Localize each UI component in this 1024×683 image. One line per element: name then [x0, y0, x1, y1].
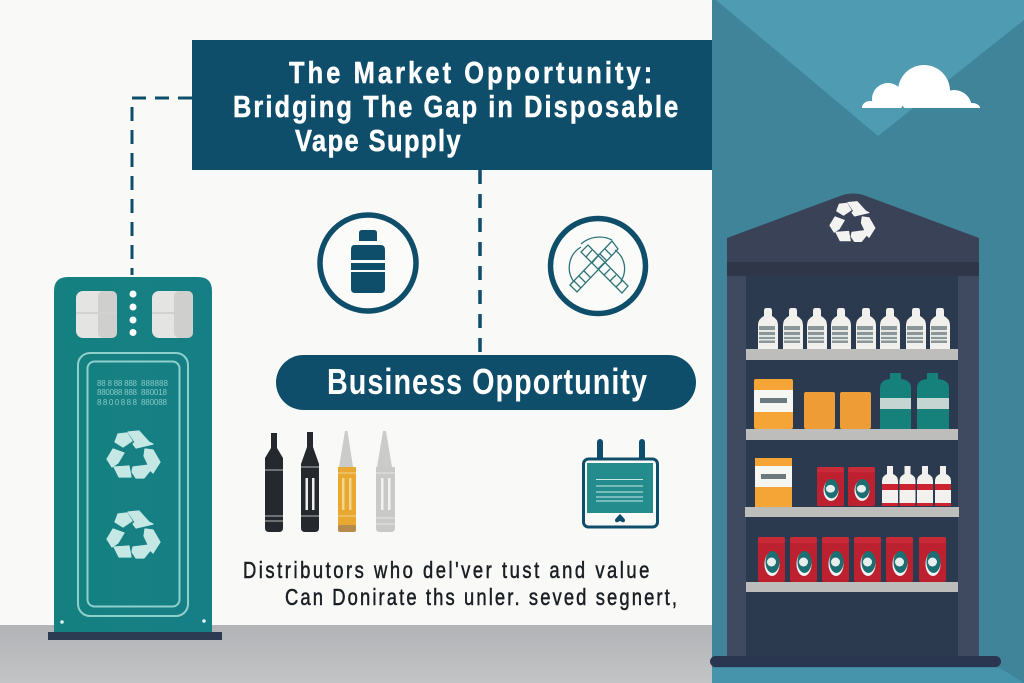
text block: distributors line: Can Donirate ths unler. seved segnert, [285, 585, 677, 611]
shelf 3: orange box, red tins and bottles [755, 458, 951, 507]
title banner [192, 40, 712, 170]
connector: dashed line to kiosk [132, 98, 192, 275]
kiosk small text: 888888 [141, 379, 169, 388]
icon: vape pens [265, 431, 395, 532]
kiosk base [48, 632, 222, 640]
cabinet base [710, 656, 1001, 667]
floor [0, 625, 712, 683]
shelf boards [745, 349, 959, 592]
panel: store shelf cabinet [710, 194, 1001, 667]
shelf 2: orange boxes and teal bottles [754, 373, 949, 429]
icon: cloud [862, 65, 980, 108]
icon: tablet display [584, 442, 658, 527]
text block: distributors line: Distributors who del'ver tust and value [243, 558, 649, 584]
shelf 4: red tins [758, 537, 946, 582]
kiosk small text [97, 379, 169, 407]
icon: crossed rulers in circle [550, 218, 646, 314]
panel: recycling kiosk [48, 277, 222, 640]
kiosk frame [78, 353, 188, 616]
heading pill: business opportunity [276, 355, 696, 410]
vape orange [338, 431, 356, 532]
shelf 1: white bottles [758, 308, 950, 349]
connector: dashed line to pill [478, 170, 482, 356]
kiosk small text: 880088 888 [97, 388, 138, 397]
kiosk indicator dots [130, 290, 136, 336]
kiosk small text: 880018 [141, 388, 168, 397]
vape grey [376, 431, 395, 532]
icon: recycle on cabinet [830, 202, 875, 242]
vape dark [301, 432, 319, 532]
title text: The Market Opportunity: [289, 56, 652, 91]
heading pill: business opportunity: Business Opportunity [327, 361, 647, 402]
kiosk small text: 880088 [141, 398, 168, 407]
title text [233, 56, 678, 159]
title text: Vape Supply [295, 124, 461, 159]
kiosk windows [76, 291, 193, 338]
icon: bottle in circle [320, 215, 416, 311]
text block: distributors line [243, 558, 677, 611]
vape black [265, 433, 283, 532]
icon: recycle bottom [107, 511, 160, 558]
kiosk small text: 8800888 [97, 398, 138, 407]
panel: teal backdrop [712, 0, 1024, 683]
kiosk small text: 88 8 88 888 [97, 379, 138, 388]
title text: Bridging The Gap in Disposable [233, 90, 678, 125]
icon: recycle top [107, 431, 160, 478]
